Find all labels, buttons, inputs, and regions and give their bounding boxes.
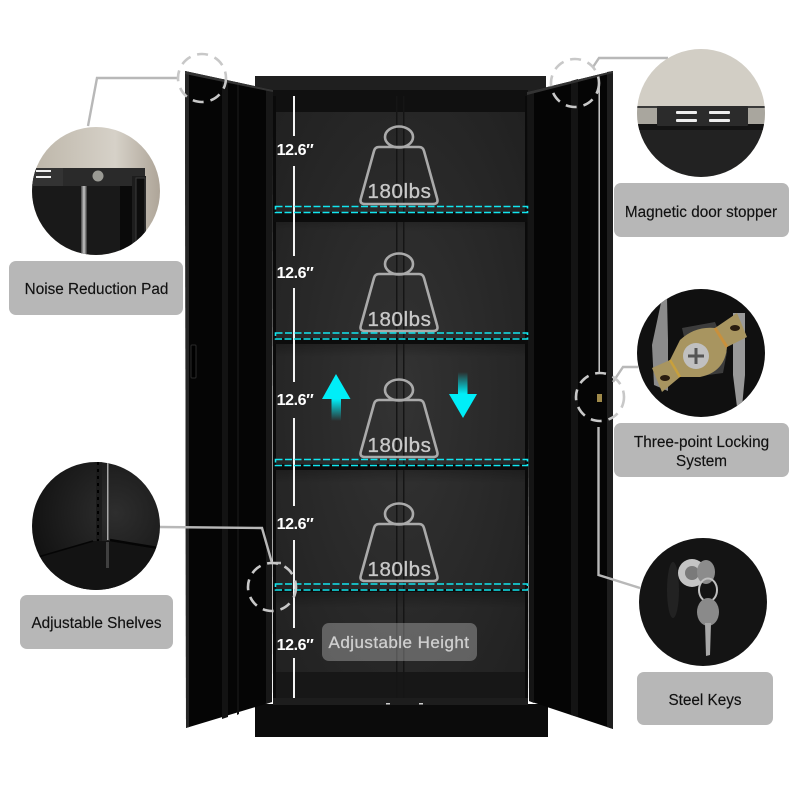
leader: locking system — [613, 367, 638, 382]
weight icon: shelf 2 — [360, 254, 438, 331]
left door — [185, 71, 273, 728]
dimension labels: 12.6″ — [277, 516, 314, 533]
photo: adjustable shelves — [32, 462, 160, 590]
weight icon: shelf 1: 180lbs — [367, 180, 432, 203]
weight icon: shelf 3: 180lbs — [367, 434, 432, 457]
dashed circle: lock — [576, 373, 624, 421]
dimension labels — [277, 142, 314, 654]
weight icon: shelf 2: 180lbs — [367, 308, 432, 331]
dimension labels: 12.6″ — [277, 637, 314, 654]
leader: noise reduction pad — [88, 78, 178, 126]
label: three-point locking system: System — [676, 453, 727, 470]
photo: noise reduction pad — [32, 127, 160, 256]
leader: steel keys — [598, 427, 640, 588]
weight icon: shelf 1 — [360, 126, 438, 204]
leader: adjustable shelves — [160, 527, 281, 563]
weight icon: shelf 4 — [360, 504, 438, 581]
height dimension line — [293, 96, 295, 698]
label: noise reduction pad — [9, 261, 183, 315]
leader: magnetic door stopper — [593, 58, 668, 67]
label: steel keys: Steel Keys — [668, 692, 742, 709]
arrow down — [449, 372, 477, 418]
right door — [527, 71, 613, 729]
lock rod — [598, 85, 600, 373]
label: three-point locking system — [614, 423, 789, 477]
photo: three-point locking system — [637, 289, 765, 417]
shelf highlights — [276, 206, 528, 590]
weight icon: shelf 4: 180lbs — [367, 558, 432, 581]
cabinet — [185, 71, 613, 737]
photo: steel keys — [639, 538, 767, 666]
adjustable height badge: Adjustable Height — [329, 633, 469, 652]
weight icon: shelf 3 — [360, 380, 438, 457]
shelves — [274, 212, 528, 592]
dimension labels: 12.6″ — [277, 392, 314, 409]
cabinet top — [255, 76, 546, 96]
photo: magnetic door stopper — [637, 49, 765, 178]
dimension labels: 12.6″ — [277, 265, 314, 282]
cabinet interior — [273, 90, 528, 704]
label: adjustable shelves: Adjustable Shelves — [31, 615, 162, 632]
dimension labels: 12.6″ — [277, 142, 314, 159]
label: magnetic door stopper: Magnetic door stopper — [625, 204, 777, 221]
label: three-point locking system: Three-point Locking — [634, 434, 769, 451]
plinth — [255, 698, 548, 737]
label: steel keys — [637, 672, 773, 725]
lock — [597, 394, 602, 402]
dashed circle: shelves — [248, 563, 296, 611]
dashed circle: door stopper — [551, 59, 599, 107]
label: magnetic door stopper — [614, 183, 789, 237]
dashed circle: noise pad — [178, 54, 226, 102]
label: adjustable shelves — [20, 595, 173, 649]
arrow up — [322, 374, 350, 421]
label: noise reduction pad: Noise Reduction Pad — [25, 281, 168, 298]
adjustable height badge — [322, 623, 477, 661]
left door handle — [191, 345, 196, 378]
